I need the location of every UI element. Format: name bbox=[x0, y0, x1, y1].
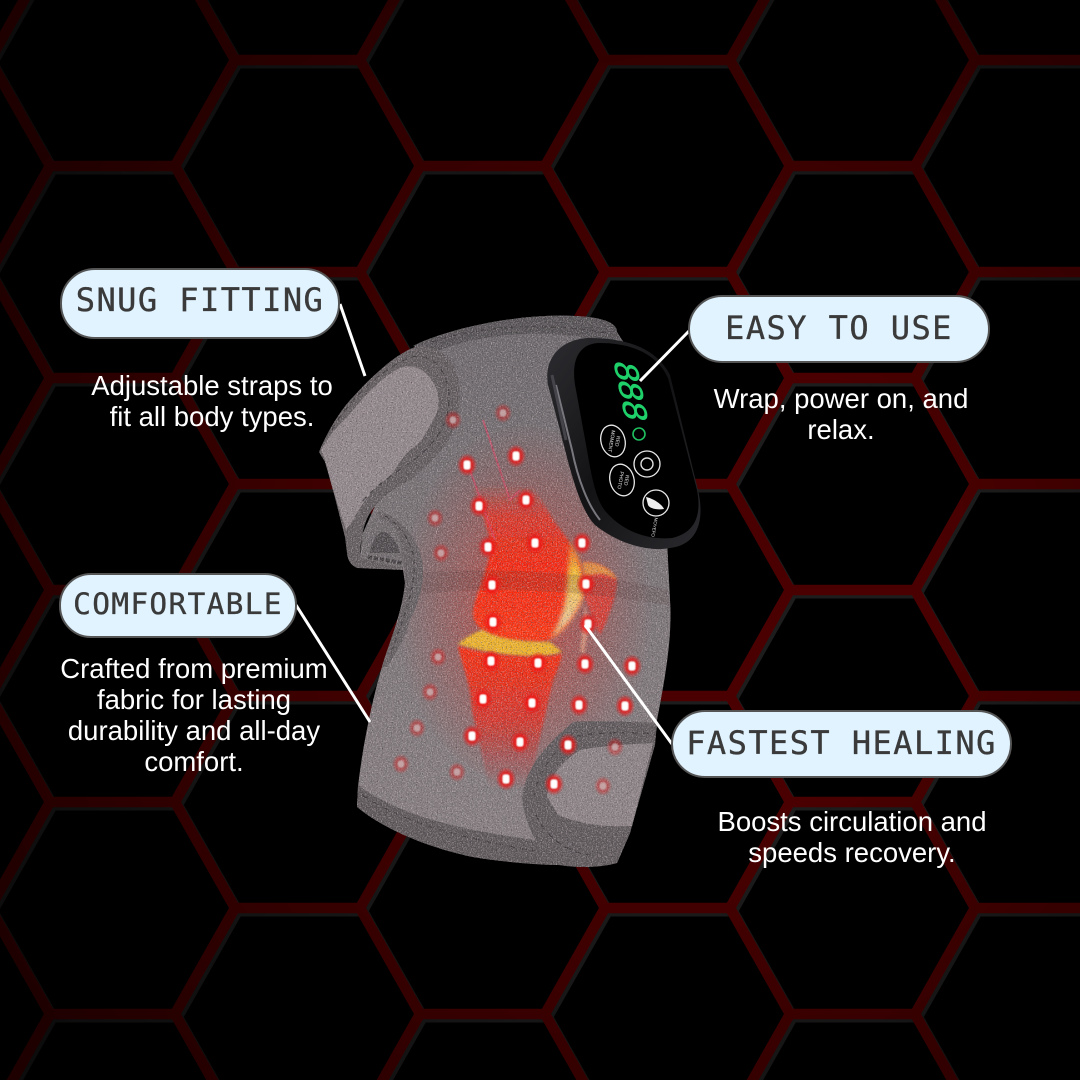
upper strap felt bbox=[321, 366, 438, 530]
status icon bbox=[633, 428, 645, 440]
upper strap outer bbox=[319, 346, 460, 667]
heat glow bbox=[395, 415, 670, 790]
text: snug fitting description: Adjustable straps to bbox=[91, 370, 333, 401]
label: comfortable bbox=[59, 573, 297, 638]
button labels: RED bbox=[613, 435, 621, 447]
button icons bbox=[641, 458, 653, 470]
upper strap stitching bbox=[332, 356, 449, 502]
second cuff band bbox=[377, 512, 423, 667]
text: comfortable description bbox=[60, 653, 328, 777]
text: easy to use description: Wrap, power on, and bbox=[714, 383, 968, 414]
muscle lines bbox=[470, 420, 520, 540]
top stitched band bbox=[413, 316, 625, 350]
fibula glow bbox=[582, 562, 617, 635]
connector lines bbox=[296, 304, 690, 744]
label: fastest healing: FASTEST HEALING bbox=[686, 724, 997, 762]
device shell bbox=[547, 338, 701, 549]
text: snug fitting description bbox=[91, 370, 333, 432]
controller device bbox=[547, 338, 701, 549]
label: fastest healing bbox=[671, 710, 1012, 778]
text: snug fitting description: fit all body types. bbox=[110, 401, 314, 432]
button labels: MOMENT bbox=[606, 430, 616, 453]
fabric sleeve with heat glow and straps bbox=[319, 316, 670, 867]
digital display: 8 bbox=[602, 357, 647, 386]
label: snug fitting bbox=[60, 268, 340, 339]
LED dots bbox=[392, 403, 642, 796]
tibia bbox=[458, 646, 562, 790]
femur bbox=[470, 475, 583, 641]
digital display: 8 bbox=[606, 376, 651, 405]
label: easy to use: EASY TO USE bbox=[725, 308, 953, 346]
text: easy to use description: relax. bbox=[807, 414, 875, 445]
text: easy to use description bbox=[714, 383, 968, 445]
label: snug fitting: SNUG FITTING bbox=[76, 281, 324, 319]
text: fastest healing description: speeds recovery. bbox=[748, 837, 956, 868]
cartilage bbox=[458, 630, 562, 656]
sleeve body bbox=[357, 316, 670, 865]
text: comfortable description: comfort. bbox=[144, 746, 244, 777]
button labels bbox=[606, 430, 659, 538]
button labels: MOYEFO bbox=[650, 517, 659, 538]
label: easy to use bbox=[688, 295, 990, 363]
touch buttons bbox=[597, 422, 669, 516]
digital display bbox=[602, 357, 655, 425]
bottom stitched band bbox=[357, 785, 560, 865]
button labels: RED bbox=[622, 474, 630, 486]
text: fastest healing description: Boosts circulation and bbox=[717, 806, 987, 837]
text: fastest healing description bbox=[717, 806, 987, 868]
device face bbox=[574, 343, 699, 538]
strap notch interior bbox=[360, 518, 403, 568]
text: comfortable description: durability and all-day bbox=[68, 715, 320, 746]
digital display: 8 bbox=[610, 396, 655, 425]
label: comfortable: COMFORTABLE bbox=[73, 587, 283, 621]
fibula shaft bbox=[580, 605, 589, 655]
text: comfortable description: Crafted from premium bbox=[60, 653, 328, 684]
knee brace bbox=[319, 316, 701, 867]
text: comfortable description: fabric for lasting bbox=[97, 684, 291, 715]
femur yellow edge bbox=[550, 540, 583, 639]
crease band bbox=[415, 570, 670, 606]
button labels: PHOTO bbox=[615, 471, 624, 490]
lower strap felt bbox=[547, 743, 653, 826]
lower wrap strap bbox=[522, 721, 657, 867]
